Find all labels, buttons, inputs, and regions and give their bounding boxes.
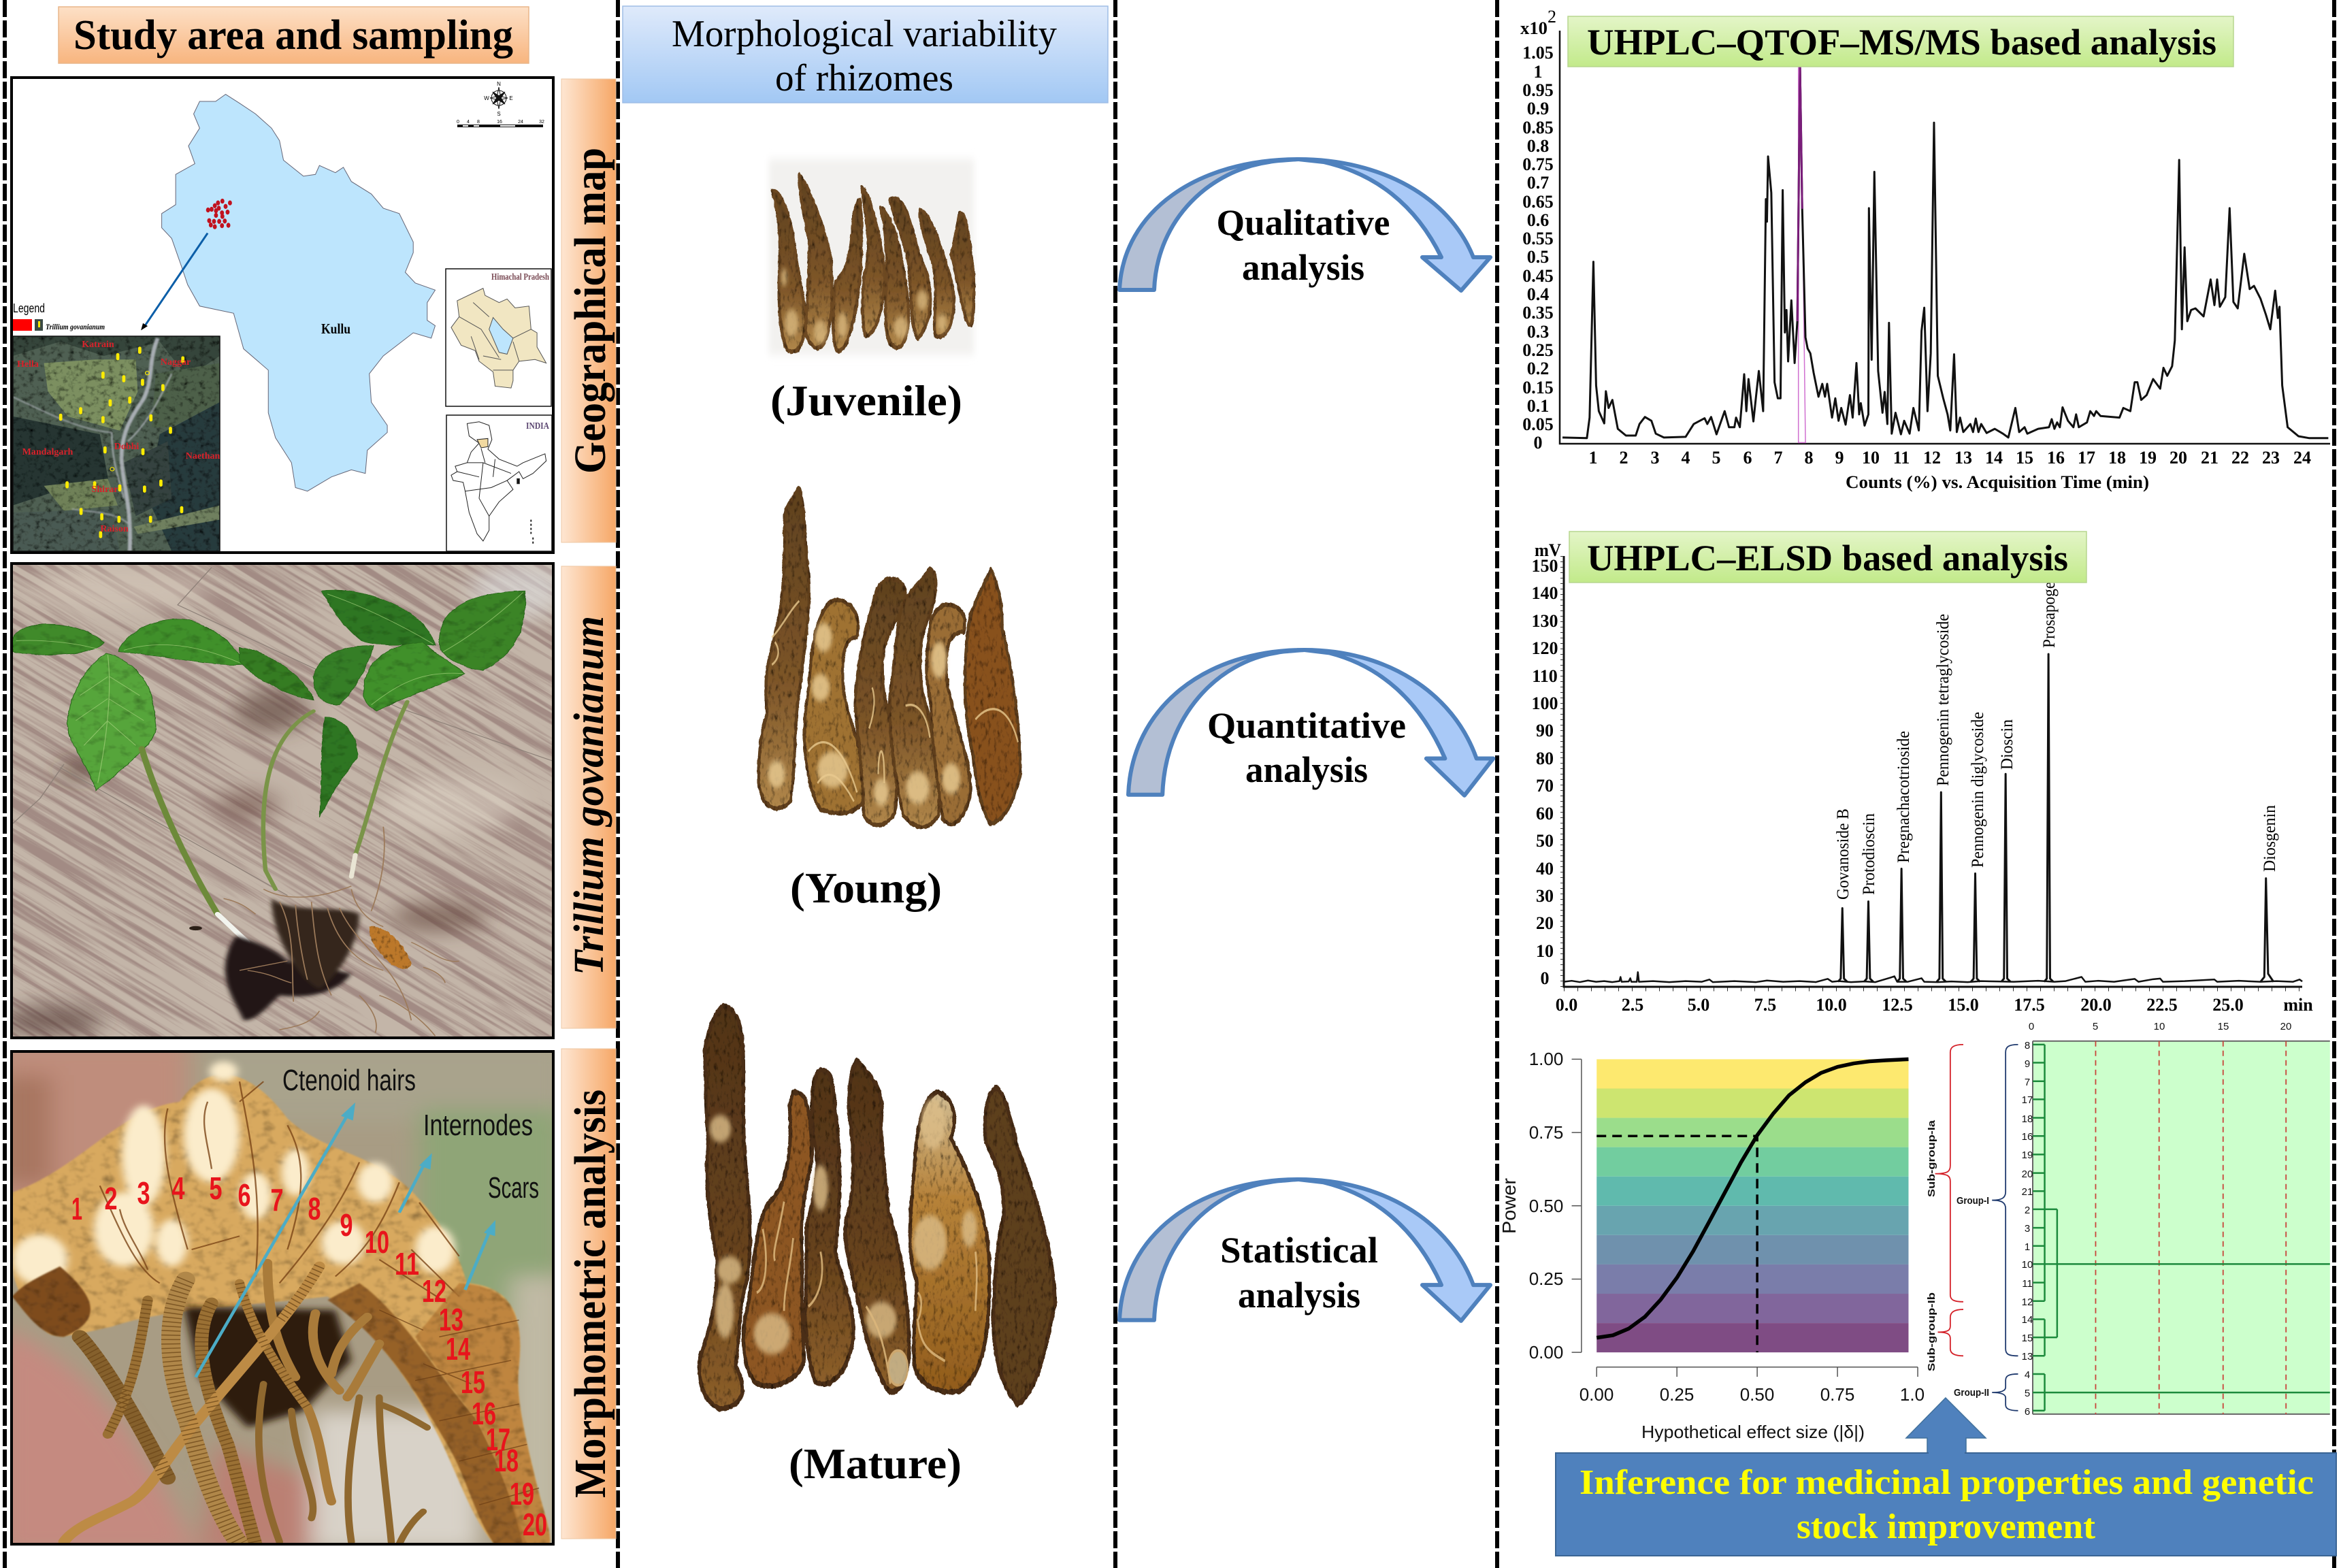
heading: morphological variability of rhizomes	[623, 6, 1108, 103]
internode numbers 1 to 20: 16	[472, 1396, 496, 1431]
y axis labels: 0.45	[1522, 266, 1554, 286]
y axis labels: 50	[1536, 831, 1554, 851]
chart: UHPLC-ELSD chromatogram	[1531, 540, 2313, 1015]
y axis labels: 130	[1531, 611, 1558, 631]
chart: statistical power curve: 0.50	[1740, 1384, 1774, 1405]
chart: dendrogram	[1926, 1021, 2330, 1418]
compound labels: Pennogenin diglycoside	[1969, 712, 1987, 868]
leaf labels: 17	[2022, 1094, 2033, 1106]
y axis labels: 140	[1531, 583, 1558, 603]
heading: morphological variability of rhizomes: Morphological variability	[672, 13, 1057, 55]
top axis labels: 0	[2029, 1021, 2034, 1032]
chart: UHPLC-QTOF-MS/MS chromatogram: x10	[1520, 18, 1548, 38]
leaf labels: 13	[2022, 1351, 2033, 1362]
compound labels: Pregnachacotrioside	[1895, 731, 1913, 863]
x axis labels: 20.0	[2080, 995, 2112, 1015]
chart: statistical power curve: 0.00	[1529, 1342, 1563, 1362]
chart: UHPLC-QTOF-MS/MS chromatogram: Counts (%) vs. Acquisition Time (min)	[1846, 472, 2149, 492]
y axis labels	[1522, 43, 1554, 453]
leaf labels: 16	[2022, 1131, 2033, 1143]
chart: UHPLC-ELSD chromatogram: mV	[1535, 540, 1561, 560]
internode numbers 1 to 20: 5	[210, 1171, 222, 1206]
compass and scale bar: 16	[497, 120, 502, 125]
heading: study area and sampling: Study area and sampling	[73, 12, 513, 59]
y axis labels: 0	[1541, 968, 1549, 988]
compass and scale bar: S	[497, 111, 501, 117]
arrow: quantitative analysis	[1128, 650, 1493, 796]
x axis labels: 17.5	[2014, 995, 2045, 1015]
axes	[1560, 31, 2330, 444]
x axis labels: 5.0	[1688, 995, 1709, 1015]
y axis labels: 30	[1536, 886, 1554, 906]
x axis labels: 5	[1712, 448, 1720, 468]
braces	[1992, 1045, 2018, 1411]
y axis labels: 0.4	[1527, 284, 1549, 304]
leaf labels: 9	[2025, 1058, 2030, 1070]
y axis labels: 80	[1536, 749, 1554, 768]
compass and scale bar: 24	[518, 120, 523, 125]
x axis labels: 23	[2262, 448, 2280, 468]
y axis labels: 0.05	[1522, 414, 1554, 434]
internode numbers 1 to 20: 4	[171, 1171, 185, 1206]
y axis labels: 0.15	[1522, 378, 1554, 397]
leaf labels: 14	[2022, 1314, 2033, 1326]
photo: young rhizomes	[759, 488, 1020, 827]
internode numbers 1 to 20: 14	[446, 1331, 470, 1367]
leaf labels: 8	[2025, 1040, 2030, 1051]
top axis labels	[2029, 1021, 2291, 1032]
leaf labels: 18	[2022, 1113, 2033, 1125]
x axis labels: 7.5	[1754, 995, 1776, 1015]
axes	[1564, 556, 2302, 987]
label: Quantitative analysis	[1207, 705, 1406, 790]
leaf labels: 15	[2022, 1333, 2033, 1344]
label: Quantitative analysis: analysis	[1245, 749, 1368, 790]
y axis labels: 110	[1532, 666, 1558, 686]
internode numbers 1 to 20: 1	[71, 1191, 82, 1226]
internode numbers 1 to 20: 6	[238, 1177, 250, 1213]
compass and scale bar: 32	[539, 120, 544, 125]
y axis labels: 120	[1531, 638, 1558, 658]
internode numbers 1 to 20: 15	[461, 1365, 485, 1400]
y axis labels	[1531, 556, 1558, 988]
x axis labels: 19	[2139, 448, 2157, 468]
callout: inference box	[1556, 1451, 2336, 1556]
wood grain	[13, 565, 552, 1036]
top axis labels: 5	[2093, 1021, 2098, 1032]
photo: juvenile rhizomes	[769, 159, 974, 355]
x axis labels: 2.5	[1622, 995, 1643, 1015]
group labels: Sub-group-Ia	[1926, 1120, 1937, 1197]
compass and scale bar: W	[484, 95, 489, 101]
compound labels	[1834, 561, 2279, 900]
leaf labels: 12	[2022, 1296, 2033, 1308]
compass and scale bar	[457, 81, 544, 127]
panel: Trillium govanianum plant photo	[10, 562, 555, 1039]
x axis labels: 24	[2293, 448, 2311, 468]
group labels: Group-I	[1957, 1195, 1989, 1207]
internode numbers 1 to 20: 18	[494, 1443, 519, 1478]
label: Statistical analysis	[1220, 1230, 1378, 1316]
y axis labels: 100	[1531, 693, 1558, 713]
y axis labels: 60	[1536, 804, 1554, 823]
internode numbers 1 to 20: 11	[395, 1246, 419, 1281]
annotations: rhizome parts: Scars	[488, 1171, 539, 1205]
inset: Himachal Pradesh map	[446, 269, 551, 406]
label: Quantitative analysis: Quantitative	[1207, 705, 1406, 746]
chart: statistical power curve: 0.75	[1529, 1122, 1563, 1143]
compound labels: Protodioscin	[1860, 813, 1878, 895]
y axis labels: 0.2	[1527, 359, 1549, 378]
y axis labels: 1.05	[1522, 43, 1554, 63]
internode numbers 1 to 20: 7	[271, 1182, 283, 1218]
leaf labels: 20	[2022, 1169, 2033, 1180]
x axis labels: 14	[1985, 448, 2003, 468]
leaf labels: 1	[2025, 1241, 2030, 1253]
chart: UHPLC-QTOF-MS/MS chromatogram: 2	[1548, 7, 1556, 27]
y axis labels: 1	[1534, 62, 1542, 82]
arrow: upward to charts	[1906, 1398, 1986, 1454]
compound labels: Prosapogenin	[2040, 561, 2059, 648]
group labels: Group-II	[1954, 1387, 1989, 1399]
chart: statistical power curve: 0.00	[1579, 1384, 1614, 1405]
internode numbers 1 to 20: 20	[523, 1507, 547, 1542]
leaf labels: 6	[2025, 1406, 2030, 1418]
label: Mature: (Mature)	[789, 1439, 962, 1488]
arrow: statistical analysis	[1119, 1179, 1490, 1321]
heading: UHPLC-ELSD based analysis: UHPLC–ELSD based analysis	[1587, 538, 2068, 578]
x axis labels: 22.5	[2146, 995, 2178, 1015]
inset: satellite map of sampling sites: Hella	[17, 359, 39, 370]
compound labels: Pennogenin tetraglycoside	[1934, 614, 1952, 786]
x axis labels: 10	[1862, 448, 1880, 468]
compass and scale bar: N	[497, 81, 501, 87]
y axis labels: 0.55	[1522, 229, 1554, 248]
x axis labels: 25.0	[2212, 995, 2244, 1015]
y axis labels: 70	[1536, 776, 1554, 796]
x axis labels: 12	[1923, 448, 1941, 468]
x axis labels: 10.0	[1816, 995, 1847, 1015]
x axis labels: 15	[2016, 448, 2033, 468]
y axis labels: 0.25	[1522, 340, 1554, 360]
annotations: rhizome parts: Internodes	[423, 1109, 533, 1142]
internode numbers 1 to 20: 9	[340, 1207, 353, 1243]
x axis labels: 20	[2170, 448, 2187, 468]
legend: Legend	[13, 301, 45, 315]
group labels: Sub-group-Ib	[1926, 1292, 1937, 1371]
group labels	[1926, 1120, 1989, 1399]
chart: statistical power curve: Hypothetical effect size (|δ|)	[1641, 1422, 1865, 1442]
inset: satellite map of sampling sites: Naggar	[161, 357, 191, 368]
x axis labels: 8	[1805, 448, 1813, 468]
stems	[142, 702, 407, 943]
x axis labels: 15.0	[1948, 995, 1979, 1015]
x axis labels: min	[2283, 995, 2313, 1015]
rhizome body	[12, 1075, 550, 1545]
internode numbers 1 to 20: 10	[365, 1224, 389, 1260]
chart: statistical power curve: 0.75	[1820, 1384, 1854, 1405]
compound labels: Govanoside B	[1834, 808, 1852, 900]
compound labels: Diosgenin	[2261, 805, 2279, 872]
y axis labels: 0.3	[1527, 322, 1549, 342]
label: Qualitative analysis: Qualitative	[1217, 202, 1390, 243]
chart: statistical power curve: 0.50	[1529, 1196, 1563, 1216]
panel: rhizome morphometric photo	[0, 1041, 567, 1555]
x axis labels: 6	[1744, 448, 1752, 468]
internode numbers 1 to 20: 12	[422, 1273, 446, 1309]
x axis labels: 9	[1835, 448, 1844, 468]
compound labels: Dioscin	[1998, 719, 2016, 770]
y axis labels: 0.75	[1522, 154, 1554, 174]
y axis labels: 0.1	[1527, 396, 1549, 416]
x axis labels: 7	[1773, 448, 1783, 468]
chromatogram trace	[1562, 67, 2328, 442]
scale scars and internodes	[100, 1081, 459, 1303]
leaf labels: 5	[2025, 1388, 2030, 1399]
internode numbers 1 to 20: 8	[308, 1191, 321, 1226]
y axis labels: 0.8	[1527, 136, 1549, 156]
top axis labels: 20	[2280, 1021, 2291, 1032]
inset: satellite map of sampling sites: Shirar	[92, 485, 118, 495]
x axis labels: 0.0	[1556, 995, 1577, 1015]
side label: Morphometric analysis: Morphometric analysis	[566, 1090, 615, 1498]
x axis labels: 4	[1681, 448, 1690, 468]
leaf labels: 21	[2022, 1186, 2033, 1198]
leaf labels: 2	[2025, 1205, 2030, 1216]
map: Kullu district	[141, 95, 436, 491]
photo: mature rhizomes	[700, 1006, 1055, 1409]
side label: Trillium govanianum	[561, 566, 616, 1028]
label: Qualitative analysis: analysis	[1242, 247, 1364, 288]
x axis labels: 11	[1893, 448, 1910, 468]
legend	[13, 301, 105, 331]
y axis labels: 20	[1536, 913, 1554, 933]
peaks and baseline	[1564, 654, 2302, 982]
internode numbers 1 to 20: 19	[510, 1476, 534, 1512]
compass and scale bar: 8	[477, 120, 480, 125]
internode numbers 1 to 20: 2	[105, 1181, 117, 1216]
inset: India map: INDIA	[526, 421, 550, 431]
root bundle	[64, 1263, 427, 1544]
heading: UHPLC-QTOF-MS/MS based analysis: UHPLC–QTOF–MS/MS based analysis	[1587, 22, 2216, 63]
inset: Himachal Pradesh map: Himachal Pradesh	[491, 272, 549, 282]
y axis labels: 0.6	[1527, 210, 1549, 230]
x axis labels: 2	[1620, 448, 1628, 468]
leaf labels: 10	[2022, 1259, 2033, 1271]
top axis labels: 15	[2218, 1021, 2229, 1032]
leaf labels: 19	[2022, 1149, 2033, 1161]
leaf labels: 7	[2025, 1077, 2030, 1088]
compass and scale bar: 0	[457, 120, 459, 125]
internode numbers 1 to 20: 17	[486, 1422, 510, 1457]
x axis labels: 18	[2108, 448, 2126, 468]
x axis labels	[1588, 448, 2311, 468]
chart: UHPLC-QTOF-MS/MS chromatogram	[1520, 7, 2330, 492]
annotations: rhizome parts	[282, 1064, 539, 1205]
y axis labels: 0	[1534, 433, 1542, 453]
inset: satellite map of sampling sites: Dobhi	[114, 442, 139, 452]
x axis labels: 13	[1954, 448, 1972, 468]
inset: satellite map of sampling sites: Mandalgarh	[22, 447, 73, 457]
x axis labels: 16	[2047, 448, 2065, 468]
leaf labels: 4	[2025, 1369, 2030, 1381]
y axis labels: 0.7	[1527, 173, 1549, 193]
compass and scale bar: E	[509, 95, 513, 101]
label: Statistical analysis: Statistical	[1220, 1230, 1378, 1271]
panel: geographical map	[12, 78, 553, 553]
y axis labels: 150	[1531, 556, 1558, 576]
chart: statistical power curve	[1499, 1049, 1925, 1442]
leaf labels	[2022, 1040, 2033, 1418]
y axis labels: 40	[1536, 859, 1554, 879]
chart: statistical power curve: 1.0	[1900, 1384, 1925, 1405]
callout: inference box: stock improvement	[1797, 1507, 2096, 1546]
x axis labels: 3	[1651, 448, 1659, 468]
y axis labels: 0.95	[1522, 80, 1554, 100]
y axis labels: 0.85	[1522, 118, 1554, 137]
label: Statistical analysis: analysis	[1238, 1275, 1360, 1316]
chart: statistical power curve: 1.00	[1529, 1049, 1563, 1069]
y axis labels: 90	[1536, 721, 1554, 740]
callout: inference box: Inference for medicinal properties and genetic	[1579, 1463, 2314, 1502]
x axis labels: 12.5	[1882, 995, 1913, 1015]
side label: Trillium govanianum: Trillium govanianum	[566, 616, 612, 975]
inset: satellite map of sampling sites: Naethan	[186, 451, 220, 461]
compass and scale bar: 4	[467, 120, 470, 125]
leaf labels: 11	[2022, 1278, 2033, 1290]
x axis labels: 17	[2078, 448, 2095, 468]
internode numbers 1 to 20: 3	[137, 1175, 150, 1211]
arrow: qualitative analysis	[1119, 159, 1490, 291]
inset: satellite map of sampling sites: Raison	[100, 524, 129, 534]
x axis labels	[1556, 995, 2313, 1015]
internode numbers 1 to 20: 13	[439, 1302, 463, 1337]
heading: morphological variability of rhizomes: of rhizomes	[775, 57, 953, 99]
chart: statistical power curve: 0.25	[1660, 1384, 1694, 1405]
inset: satellite map of sampling sites	[13, 336, 220, 551]
inset: India map	[446, 415, 552, 551]
top axis labels: 10	[2154, 1021, 2165, 1032]
leaf labels: 3	[2025, 1223, 2030, 1235]
y axis labels: 10	[1536, 941, 1554, 961]
annotation arrows	[195, 1102, 495, 1377]
label: Kullu: Kullu	[321, 321, 350, 337]
chart: statistical power curve: Power	[1499, 1178, 1520, 1234]
x axis labels: 1	[1588, 448, 1598, 468]
x axis labels: 22	[2231, 448, 2249, 468]
plant leaves	[13, 590, 525, 817]
x axis labels: 21	[2201, 448, 2219, 468]
label: Juvenile: (Juvenile)	[770, 376, 962, 425]
label: Qualitative analysis	[1217, 202, 1390, 288]
soil and roots	[225, 898, 359, 1020]
y axis labels: 0.35	[1522, 303, 1554, 323]
side label: Geographical map: Geographical map	[566, 148, 615, 474]
legend: Trillium govanianum	[46, 322, 105, 331]
label: Young: (Young)	[790, 864, 942, 912]
chart: statistical power curve: 0.25	[1529, 1269, 1563, 1289]
y axis labels: 0.9	[1527, 99, 1549, 118]
y axis labels: 0.5	[1527, 247, 1549, 267]
annotations: rhizome parts: Ctenoid hairs	[282, 1064, 416, 1097]
internode numbers 1 to 20	[71, 1171, 547, 1542]
y axis labels: 0.65	[1522, 192, 1554, 212]
inset: satellite map of sampling sites: Katrain	[82, 340, 114, 350]
